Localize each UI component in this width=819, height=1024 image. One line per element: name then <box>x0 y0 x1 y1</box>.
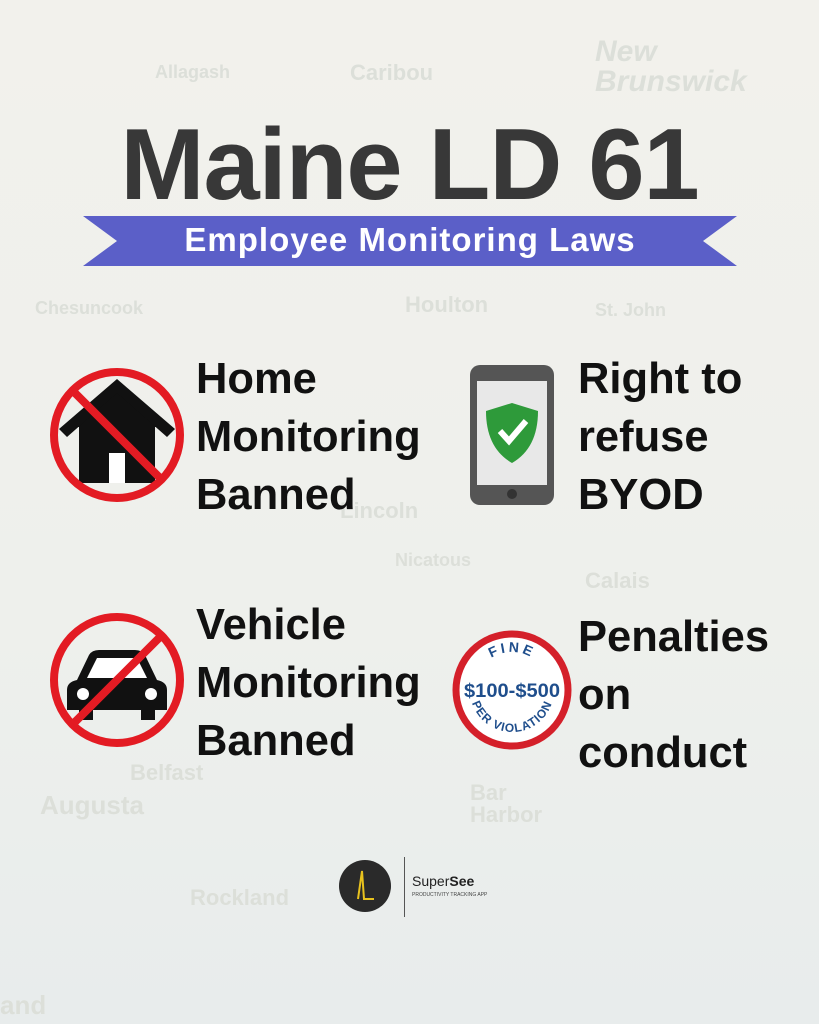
background map: Nicatous <box>395 550 471 570</box>
text: vehicle monitoring banned: Monitoring <box>196 659 421 707</box>
background map: Rockland <box>190 885 289 910</box>
background map: and <box>0 990 46 1020</box>
background map: Chesuncook <box>35 298 143 318</box>
text: home monitoring banned: Banned <box>196 471 356 519</box>
logo: SuperSee: PRODUCTIVITY TRACKING APP <box>412 892 487 898</box>
text: home monitoring banned <box>196 355 421 519</box>
text: home monitoring banned: Home <box>196 355 317 403</box>
background map: Houlton <box>405 292 488 317</box>
text: right to refuse BYOD: BYOD <box>578 471 704 519</box>
icon: fine badge: FINE <box>488 642 534 658</box>
logo: SuperSee: SuperSee <box>412 873 474 889</box>
text: vehicle monitoring banned: Vehicle <box>196 601 346 649</box>
background map: Caribou <box>350 60 433 85</box>
ribbon banner: Employee Monitoring Laws <box>184 221 636 258</box>
background map: Augusta <box>40 790 144 820</box>
background map: Allagash <box>155 62 230 82</box>
icon: fine badge <box>452 630 572 750</box>
icon: house banned <box>50 368 184 502</box>
title: Maine LD 61 <box>120 109 699 221</box>
text: right to refuse BYOD: Right to <box>578 355 742 403</box>
icon: fine badge: $100-$500 <box>464 681 560 702</box>
background map: Belfast <box>130 760 203 785</box>
text: penalties on conduct: conduct <box>578 729 747 777</box>
background map: St. John <box>595 300 666 320</box>
text: vehicle monitoring banned <box>196 601 421 765</box>
background map: Bar <box>470 780 507 805</box>
background map: Calais <box>585 568 650 593</box>
text: home monitoring banned: Monitoring <box>196 413 421 461</box>
background map: New <box>595 35 657 68</box>
logo: SuperSee <box>339 857 488 917</box>
icon: car banned <box>50 613 184 747</box>
icon: phone shield <box>470 365 554 505</box>
background map: Brunswick <box>595 65 747 98</box>
text: vehicle monitoring banned: Banned <box>196 717 356 765</box>
icon: fine badge: PER VIOLATION <box>472 700 552 732</box>
text: penalties on conduct: on <box>578 671 631 719</box>
text: penalties on conduct: Penalties <box>578 613 769 661</box>
background map: Harbor <box>470 802 542 827</box>
ribbon banner <box>83 216 737 266</box>
text: right to refuse BYOD: refuse <box>578 413 709 461</box>
text: penalties on conduct <box>578 613 769 777</box>
background map: Lincoln <box>340 498 418 523</box>
text: right to refuse BYOD <box>578 355 742 519</box>
